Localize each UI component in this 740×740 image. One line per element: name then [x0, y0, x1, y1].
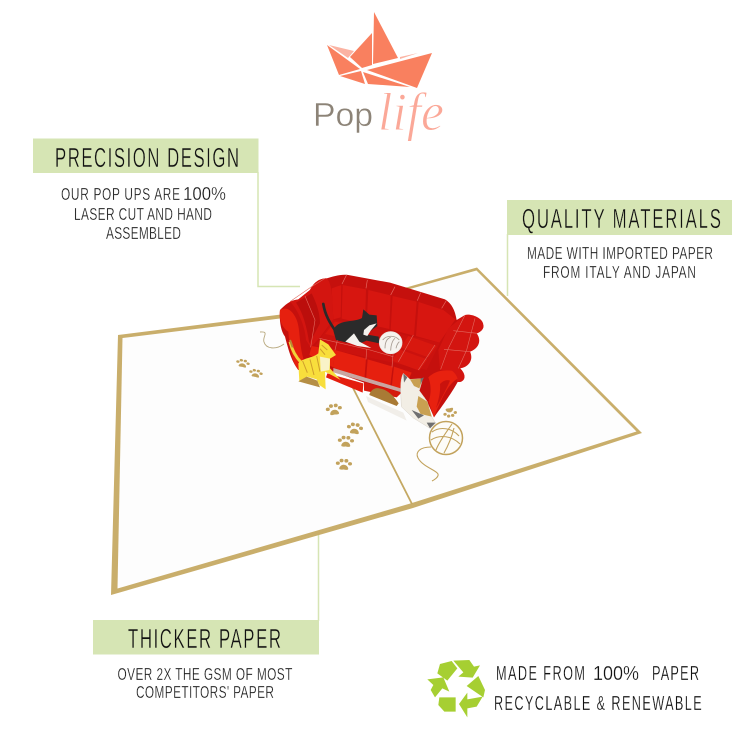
front lower strip [326, 368, 402, 397]
heading bar [33, 138, 258, 173]
description [527, 244, 713, 283]
callout connector: precision design [258, 172, 300, 286]
yarn on sofa [379, 332, 402, 354]
logo: Poplife paper boat [313, 12, 444, 142]
cat: calico [401, 373, 436, 428]
description: MADE WITH IMPORTED PAPER [527, 244, 713, 264]
callout connector: quality materials [506, 234, 508, 296]
callout connector: thicker paper [318, 535, 320, 621]
wordmark: life: life [378, 82, 444, 142]
yarn string left [260, 332, 284, 348]
yarn ball with tail [417, 422, 462, 481]
heading: THICKER PAPER [128, 623, 281, 654]
recycling statement: MADE FROM [496, 662, 585, 685]
panel: thicker paper [93, 620, 319, 703]
description: COMPETITORS' PAPER [136, 683, 274, 703]
front faces [309, 346, 412, 391]
cat: yellow tabby [290, 339, 341, 389]
description [61, 184, 226, 244]
icon: paper boat [327, 12, 432, 88]
back cushions [332, 285, 455, 343]
heading: PRECISION DESIGN [55, 142, 239, 173]
description: 100% [183, 184, 226, 204]
heading: QUALITY MATERIALS [522, 203, 721, 234]
left arm [280, 278, 333, 370]
pop-up card [111, 268, 642, 595]
description: FROM ITALY AND JAPAN [543, 263, 696, 283]
recycling statement: PAPER [652, 662, 699, 685]
fold line [352, 386, 412, 504]
description: ASSEMBLED [106, 224, 181, 244]
right page [352, 270, 636, 503]
card gold backing [111, 268, 642, 595]
seat cushions back row [325, 322, 437, 371]
right arm [428, 315, 483, 417]
recycling statement: 100% [593, 662, 639, 685]
description: OUR POP UPS ARE [61, 185, 180, 205]
description [118, 665, 292, 703]
sofa silhouette [280, 275, 483, 417]
sofa [280, 275, 483, 428]
paw prints [235, 358, 458, 470]
seat seams [319, 335, 435, 370]
description: OVER 2X THE GSM OF MOST [118, 665, 292, 685]
top strip lines [342, 275, 447, 308]
heading bar [93, 620, 319, 654]
panel: precision design [33, 138, 258, 244]
recycling statement: RECYCLABLE & RENEWABLE [494, 692, 702, 715]
icon: recycling arrows [427, 660, 485, 717]
wordmark: Pop: Pop [313, 96, 373, 133]
cat: black and white [323, 304, 379, 348]
left page [118, 310, 412, 588]
panel: quality materials [507, 200, 732, 283]
description: LASER CUT AND HAND [74, 205, 212, 225]
cat food mound [366, 388, 407, 421]
heading bar [507, 200, 732, 235]
seat [315, 319, 440, 370]
recycling statement [494, 662, 702, 715]
